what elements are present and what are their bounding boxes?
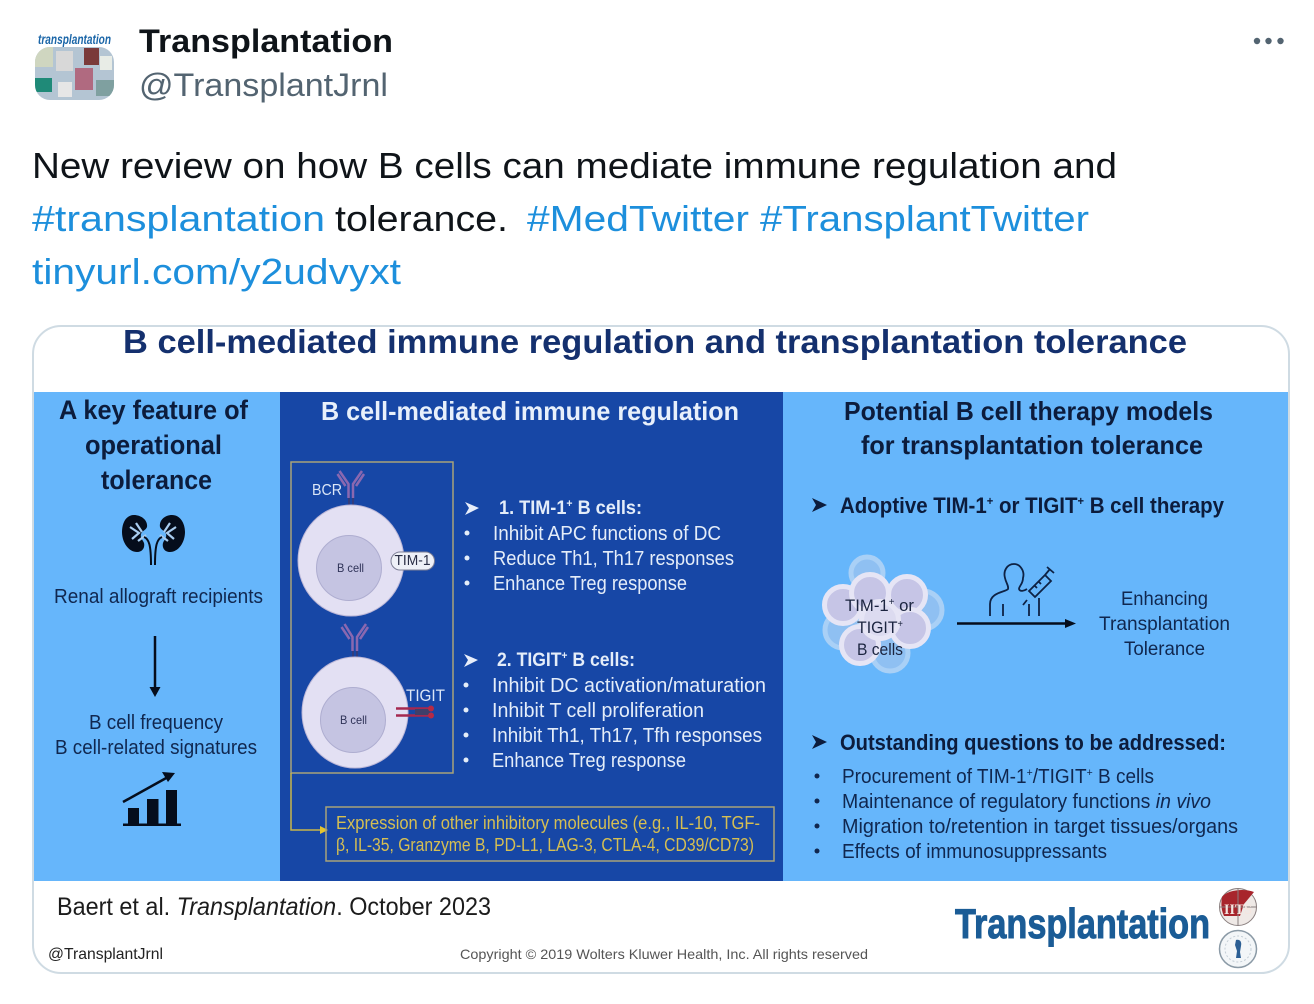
avatar: journal cover: transplantation bbox=[38, 31, 111, 47]
list: TIGIT B cells: Inhibit Th1, Th17, Tfh responses bbox=[492, 725, 762, 747]
list: TIM-1 B cells: Inhibit APC functions of DC bbox=[493, 523, 721, 545]
subheading: outstanding questions: Outstanding questions to be addressed: bbox=[840, 730, 1226, 755]
text: B cell frequency and signatures: B cell frequency bbox=[89, 712, 223, 734]
citation: Baert et al. Transplantation. October 2023 bbox=[57, 893, 491, 921]
panel heading bbox=[59, 395, 249, 495]
subheading: adoptive therapy: + bbox=[987, 494, 993, 508]
society logo: IITS globe: IITS bbox=[1224, 902, 1252, 918]
arrow: therapy to tolerance bbox=[957, 619, 1076, 628]
icon: B cell cluster bbox=[824, 557, 942, 671]
subheading: adoptive therapy: B cell therapy bbox=[1084, 493, 1225, 518]
diagram: TIGIT B cell: TIGIT bbox=[406, 687, 445, 705]
list: TIM-1 B cells bbox=[464, 498, 734, 595]
text: enhancing transplantation tolerance: Transplantation bbox=[1099, 613, 1230, 635]
icon: B cell cluster: + bbox=[898, 619, 903, 630]
account name: Transplantation bbox=[139, 23, 393, 59]
diagram: TIM-1 B cell: TIM-1 bbox=[394, 553, 430, 569]
tweet text bbox=[32, 145, 1117, 292]
icon: B cell cluster: TIGIT bbox=[857, 618, 900, 637]
list: TIGIT B cells bbox=[464, 650, 766, 772]
list: TIGIT B cells: Inhibit DC activation/maturation bbox=[492, 675, 766, 697]
panel: potential B cell therapy models bbox=[812, 396, 1238, 863]
panel heading: tolerance bbox=[101, 465, 212, 495]
icon: rising bar chart bbox=[123, 772, 181, 826]
diagram: TIM-1 B cell bbox=[298, 471, 434, 616]
list: TIGIT B cells: 2. TIGIT bbox=[497, 650, 567, 671]
list: TIM-1 B cells: B cells: bbox=[573, 498, 642, 519]
account handle: @TransplantJrnl bbox=[139, 67, 388, 103]
list: TIGIT B cells: Enhance Treg response bbox=[492, 750, 686, 772]
subheading: adoptive therapy bbox=[812, 493, 1225, 518]
arrow: down bbox=[150, 636, 160, 697]
icon: B cell cluster: TIM-1 bbox=[845, 596, 889, 615]
list: TIGIT B cells: B cells: bbox=[568, 650, 635, 671]
panel heading: A key feature of bbox=[59, 395, 249, 425]
tweet text: New review on how B cells can mediate immune regulation and bbox=[32, 145, 1117, 186]
subheading: adoptive therapy: or TIGIT bbox=[993, 493, 1078, 518]
list: outstanding questions: Procurement of TIM-1 bbox=[842, 766, 1036, 788]
panel heading: operational bbox=[85, 430, 222, 460]
avatar: journal cover bbox=[35, 34, 114, 100]
diagram: TIM-1 B cell: B cell bbox=[337, 561, 364, 575]
text: enhancing transplantation tolerance bbox=[1099, 588, 1230, 660]
list: outstanding questions: Effects of immunosuppressants bbox=[842, 841, 1107, 863]
list: TIGIT B cells: + bbox=[562, 650, 568, 662]
list: TIM-1 B cells: + bbox=[566, 498, 573, 510]
list: outstanding questions: /TIGIT bbox=[1033, 766, 1087, 788]
icon: B cell cluster: or bbox=[894, 596, 914, 615]
tweet text: #MedTwitter bbox=[527, 198, 749, 239]
list: TIM-1 B cells: 1. TIM-1 bbox=[499, 498, 570, 519]
subheading: adoptive therapy: + bbox=[1077, 494, 1084, 508]
copyright: Copyright © 2019 Wolters Kluwer Health, Inc. All rights reserved bbox=[460, 946, 868, 962]
footer handle: @TransplantJrnl bbox=[48, 946, 163, 963]
list: TIM-1 B cells: Enhance Treg response bbox=[493, 573, 687, 595]
more options icon bbox=[1254, 38, 1284, 44]
diagram: TIGIT B cell: B cell bbox=[340, 713, 367, 727]
list: TIM-1 B cells: Reduce Th1, Th17 responses bbox=[493, 548, 734, 570]
icon: kidneys bbox=[122, 515, 185, 565]
icon: patient with syringe bbox=[990, 564, 1054, 616]
society logo: round seal bbox=[1220, 930, 1256, 968]
text: B cell frequency and signatures bbox=[55, 712, 257, 759]
cell diagram frame bbox=[291, 462, 453, 773]
main title: B cell-mediated immune regulation and transplantation tolerance bbox=[123, 323, 1187, 360]
society logo: IITS globe bbox=[1220, 888, 1256, 926]
list: outstanding questions: + bbox=[1087, 767, 1093, 779]
journal logo: Transplantation bbox=[955, 900, 1210, 947]
panel heading: Potential B cell therapy models bbox=[844, 396, 1213, 426]
list: outstanding questions: Maintenance of regulatory functions in vivo bbox=[842, 791, 1211, 813]
panel: B cell-mediated immune regulation bbox=[291, 396, 774, 861]
text: enhancing transplantation tolerance: Tolerance bbox=[1124, 638, 1205, 660]
diagram: TIGIT B cell bbox=[302, 624, 445, 768]
tweet text: #transplantation bbox=[32, 198, 325, 239]
text: B cell frequency and signatures: B cell-related signatures bbox=[55, 737, 257, 759]
list: outstanding questions: B cells bbox=[1093, 766, 1154, 788]
panel heading: B cell-mediated immune regulation bbox=[321, 396, 739, 426]
panel: operational tolerance bbox=[54, 395, 263, 826]
tweet text: #TransplantTwitter bbox=[760, 198, 1089, 239]
icon: B cell cluster: B cells bbox=[857, 640, 903, 659]
text: enhancing transplantation tolerance: Enhancing bbox=[1121, 588, 1208, 610]
panel heading bbox=[844, 396, 1213, 460]
icon: B cell cluster: + bbox=[889, 597, 895, 608]
list: outstanding questions: Migration to/retention in target tissues/organs bbox=[842, 816, 1238, 838]
tweet text: tolerance. bbox=[335, 198, 508, 239]
callout: other inhibitory molecules: Expression of other inhibitory molecules (e.g., IL-10, TGF- bbox=[336, 813, 760, 833]
infographic card bbox=[33, 323, 1289, 973]
text: renal allograft recipients: Renal allograft recipients bbox=[54, 586, 263, 608]
list: outstanding questions: + bbox=[1027, 767, 1033, 779]
list: outstanding questions bbox=[814, 766, 1238, 863]
subheading: adoptive therapy: Adoptive TIM-1 bbox=[840, 493, 998, 518]
tweet text: tinyurl.com/y2udvyxt bbox=[32, 251, 401, 292]
callout: other inhibitory molecules: β, IL-35, Granzyme B, PD-L1, LAG-3, CTLA-4, CD39/CD73) bbox=[336, 835, 754, 855]
panel heading: for transplantation tolerance bbox=[861, 430, 1203, 460]
list: TIGIT B cells: Inhibit T cell proliferation bbox=[492, 700, 704, 722]
connector arrow to other molecules bbox=[291, 773, 328, 834]
callout: other inhibitory molecules bbox=[326, 807, 774, 861]
diagram: TIM-1 B cell: BCR bbox=[312, 482, 342, 499]
